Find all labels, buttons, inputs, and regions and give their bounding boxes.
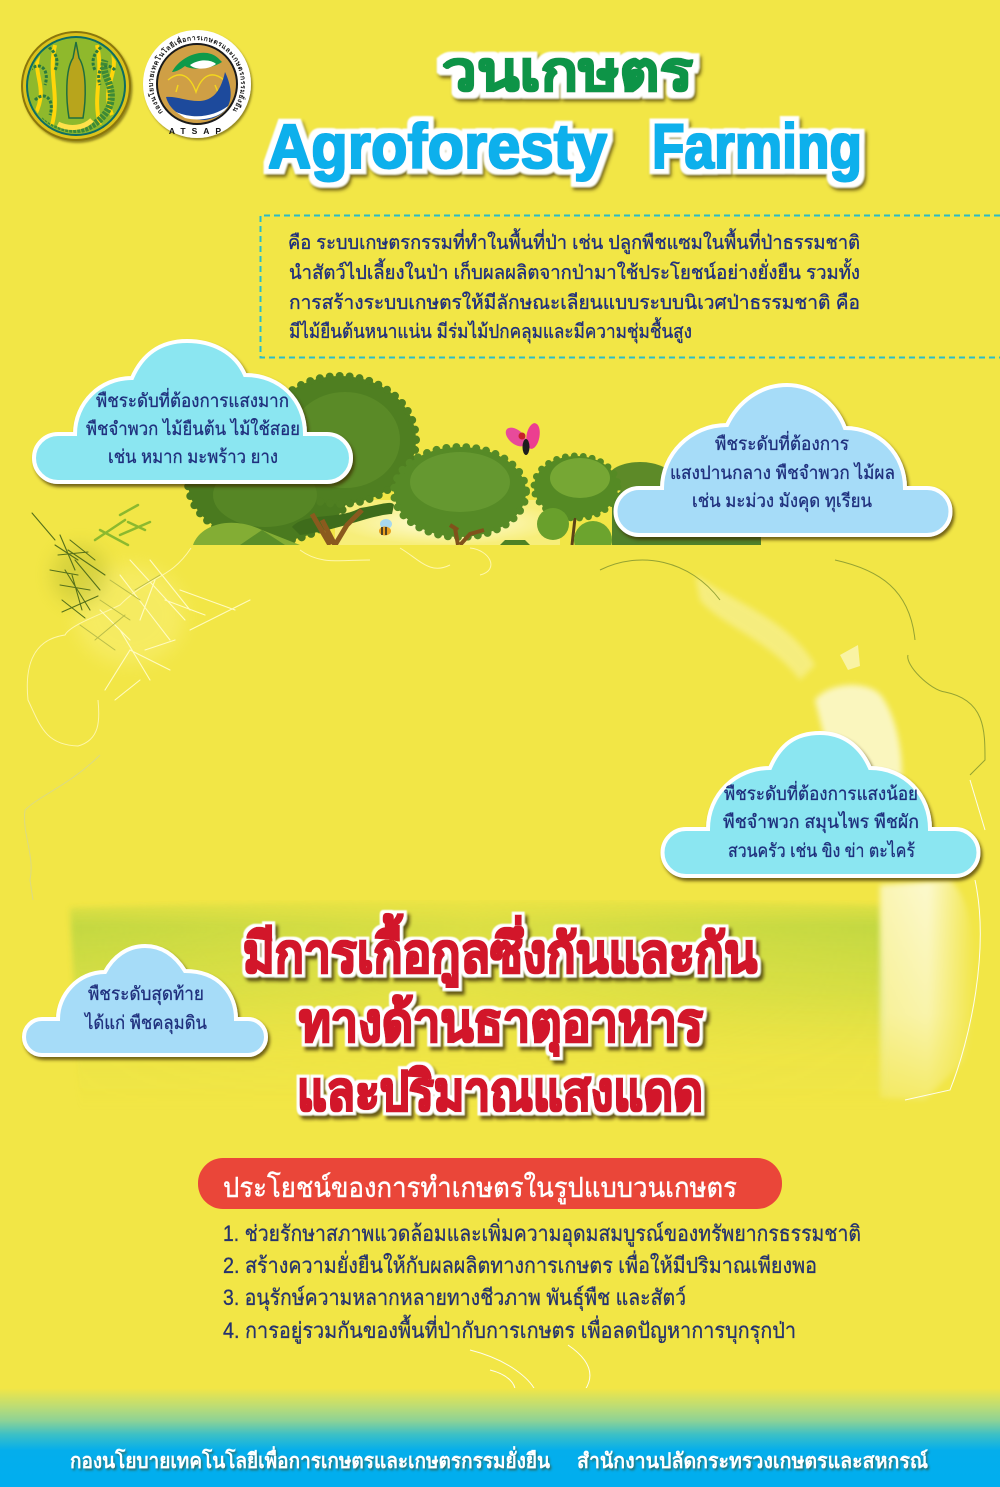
faded bamboo foliage, upper left <box>32 505 250 700</box>
logo: Ministry of Agriculture seal <box>22 32 130 140</box>
faded green field band <box>68 902 884 1043</box>
title: English: Agroforesty <box>268 112 607 182</box>
cloud: low-light plants <box>662 733 978 876</box>
cloud: low-light plants: พืชจำพวก สมุนไพร พืชผัก <box>723 811 919 834</box>
logo: ATSAP <box>143 30 254 142</box>
definition text: นำสัตว์ไปเลี้ยงในป่า เก็บผลผลิตจากป่ามาใช้ประโยชน์อย่างยั่งยืน รวมทั้ง <box>289 258 860 284</box>
title: English: Farming <box>652 112 862 182</box>
curved organisation name: กองนโยบายเทคโนโลยีเพื่อการเกษตรและเกษตรกรรมยั่งยืน <box>148 36 246 114</box>
logo: ATSAP: ATSAP <box>169 126 227 136</box>
fish <box>166 72 231 120</box>
icon: butterfly <box>502 422 542 455</box>
cloud: mid-light plants: เช่น มะม่วง มังคุด ทุเรียน <box>692 490 872 513</box>
cloud: ground cover plants <box>24 946 266 1055</box>
cloud: mid-light plants: พืชระดับที่ต้องการ <box>715 431 849 454</box>
cloud: mid-light plants <box>616 385 950 535</box>
title: English <box>268 112 862 182</box>
definition text: มีไม้ยืนต้นหนาแน่น มีร่มไม้ปกคลุมและมีความชุ่มชื้นสูง <box>289 317 692 344</box>
cream glow under the trees <box>335 500 560 545</box>
yellow sprout <box>168 75 224 92</box>
definition text: การสร้างระบบเกษตรให้มีลักษณะเลียนแบบระบบนิเวศป่าธรรมชาติ คือ <box>289 291 860 314</box>
footer text <box>70 1445 928 1473</box>
benefits list: 1. ช่วยรักษาสภาพแวดล้อมและเพิ่มความอุดมสมบูรณ์ของทรัพยากรธรรมชาติ <box>223 1218 861 1247</box>
definition box <box>260 216 1000 358</box>
faded white glow at right edge of field <box>695 575 976 1100</box>
benefits list: 4. การอยู่รวมกันของพื้นที่ป่ากับการเกษตร เพื่อลดปัญหาการบุกรุกป่า <box>223 1315 796 1344</box>
cloud: high-light plants: พืชจำพวก ไม้ยืนต้น ไม้ใช้สอย <box>86 418 300 439</box>
title: Thai: วนเกษตร <box>442 42 693 102</box>
central red heading: มีการเกื้อกูลซึ่งกันและกัน <box>243 914 757 987</box>
back right tree <box>608 462 761 545</box>
definition text: คือ ระบบเกษตรกรรมที่ทำในพื้นที่ป่า เช่น ปลูกพืชแซมในพื้นที่ป่าธรรมชาติ <box>288 228 860 255</box>
benefits list: 3. อนุรักษ์ความหลากหลายทางชีวภาพ พันธุ์พืช และสัตว์ <box>223 1285 686 1311</box>
cloud: mid-light plants: แสงปานกลาง พืชจำพวก ไม้ผล <box>670 462 895 483</box>
faded outlines of the missing forest illustration <box>25 548 985 1390</box>
footer text: สำนักงานปลัดกระทรวงเกษตรและสหกรณ์ <box>577 1449 928 1473</box>
benefits list <box>223 1218 861 1344</box>
definition text <box>288 228 860 344</box>
cloud: high-light plants: พืชระดับที่ต้องการแสงมาก <box>96 388 289 411</box>
cloud: ground cover plants: ได้แก่ พืชคลุมดิน <box>83 1012 207 1035</box>
cloud: low-light plants: พืชระดับที่ต้องการแสงน้อย <box>724 781 918 804</box>
small right tree <box>534 456 618 559</box>
central red heading: และปริมาณแสงแดด <box>297 1062 703 1122</box>
cloud: high-light plants: เช่น หมาก มะพร้าว ยาง <box>108 446 278 467</box>
icon: bee <box>379 519 392 536</box>
cloud: high-light plants <box>34 341 351 482</box>
large tree <box>188 376 416 545</box>
middle tree <box>394 447 530 545</box>
benefits heading pill: ประโยชน์ของการทำเกษตรในรูปแบบวนเกษตร <box>223 1171 737 1205</box>
cloud: low-light plants: สวนครัว เช่น ขิง ข่า ตะไคร้ <box>728 840 915 861</box>
benefits list: 2. สร้างความยั่งยืนให้กับผลผลิตทางการเกษตร เพื่อให้มีปริมาณเพียงพอ <box>223 1250 817 1278</box>
footer text: กองนโยบายเทคโนโลยีเพื่อการเกษตรและเกษตรกรรมยั่งยืน <box>70 1445 551 1473</box>
forest illustration <box>188 376 761 559</box>
benefits heading pill <box>198 1158 782 1209</box>
footer band <box>0 1388 1000 1487</box>
central red heading <box>243 914 757 1122</box>
central red heading: ทางด้านธาตุอาหาร <box>299 993 703 1057</box>
cloud: ground cover plants: พืชระดับสุดท้าย <box>88 983 204 1006</box>
leaf <box>172 53 222 72</box>
